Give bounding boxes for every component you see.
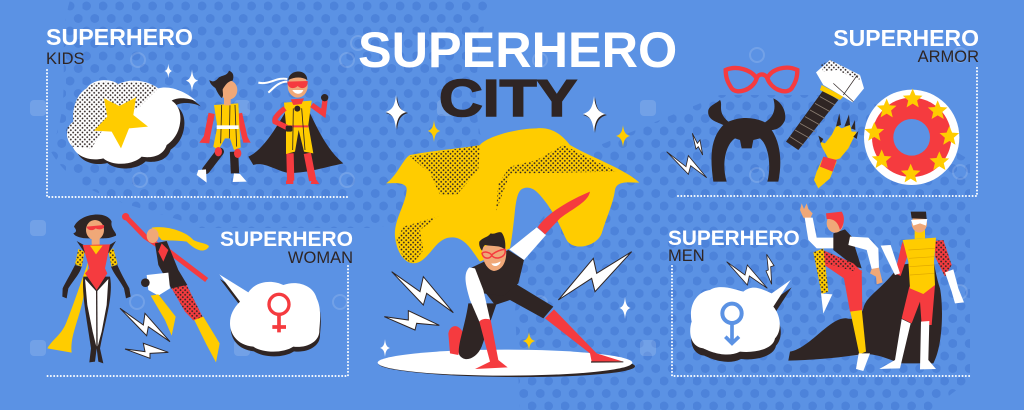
main title [358, 21, 677, 128]
heading: armor [833, 25, 979, 66]
boy with cape [248, 71, 343, 184]
red glasses [726, 68, 797, 91]
central hero [378, 128, 639, 378]
standing heroine [47, 215, 131, 363]
hero with dark cape [879, 212, 964, 369]
dotted frame: men [672, 266, 970, 376]
men artwork [690, 203, 964, 371]
caped hero cape [788, 260, 942, 363]
speech cloud with female symbol [219, 274, 321, 356]
forward leg [545, 309, 622, 362]
armor artwork [667, 60, 959, 188]
hammer [786, 60, 864, 150]
hips and forward thigh [483, 283, 553, 318]
sparkles [165, 64, 198, 92]
floor disc shadow [378, 352, 635, 378]
flying heroine [122, 213, 220, 362]
heading: woman: SUPERHERO [220, 228, 353, 251]
rear foot [448, 326, 463, 355]
lightning bolts [727, 254, 774, 288]
hero raising arm [800, 203, 883, 371]
heading: men: SUPERHERO [668, 227, 800, 250]
heading: woman [220, 228, 353, 267]
kids artwork [67, 64, 343, 184]
heading: men: MEN [668, 247, 705, 265]
panel: men [668, 203, 970, 376]
dotted frame: kids [47, 70, 347, 197]
kid in yellow shorts [197, 71, 251, 183]
panel: kids [46, 24, 347, 197]
woman artwork [47, 213, 321, 363]
heading: armor: SUPERHERO [833, 25, 979, 51]
heading: kids: SUPERHERO [46, 24, 193, 50]
gauntlet [814, 113, 858, 188]
panel: armor [667, 25, 979, 196]
heading: woman: WOMAN [288, 249, 353, 267]
torso [470, 250, 524, 296]
horned helmet [708, 98, 785, 182]
cape halftone [397, 145, 617, 264]
heading: armor: ARMOR [918, 48, 979, 66]
star shield [864, 89, 959, 185]
yellow cape [386, 128, 639, 263]
panel: woman [47, 213, 353, 376]
lightning bolts [120, 308, 170, 358]
supporting arm [465, 267, 490, 322]
floor disc [378, 350, 632, 376]
lightning bolts [384, 252, 632, 330]
title line: city: CITY [439, 70, 577, 128]
dotted frame: woman [47, 266, 348, 376]
cloud with star [67, 80, 201, 168]
central sparkles [380, 95, 631, 357]
raised arm [509, 227, 546, 260]
dotted frame: armor [676, 68, 977, 196]
rear leg [459, 303, 497, 359]
title line: superhero: SUPERHERO [358, 21, 677, 78]
speech cloud with male symbol [690, 280, 792, 362]
heading: men [668, 227, 800, 265]
head [479, 232, 506, 271]
heading: kids [46, 24, 193, 68]
faint watermark marks [30, 36, 967, 356]
lightning bolts [667, 133, 707, 178]
heading: kids: KIDS [46, 50, 85, 68]
